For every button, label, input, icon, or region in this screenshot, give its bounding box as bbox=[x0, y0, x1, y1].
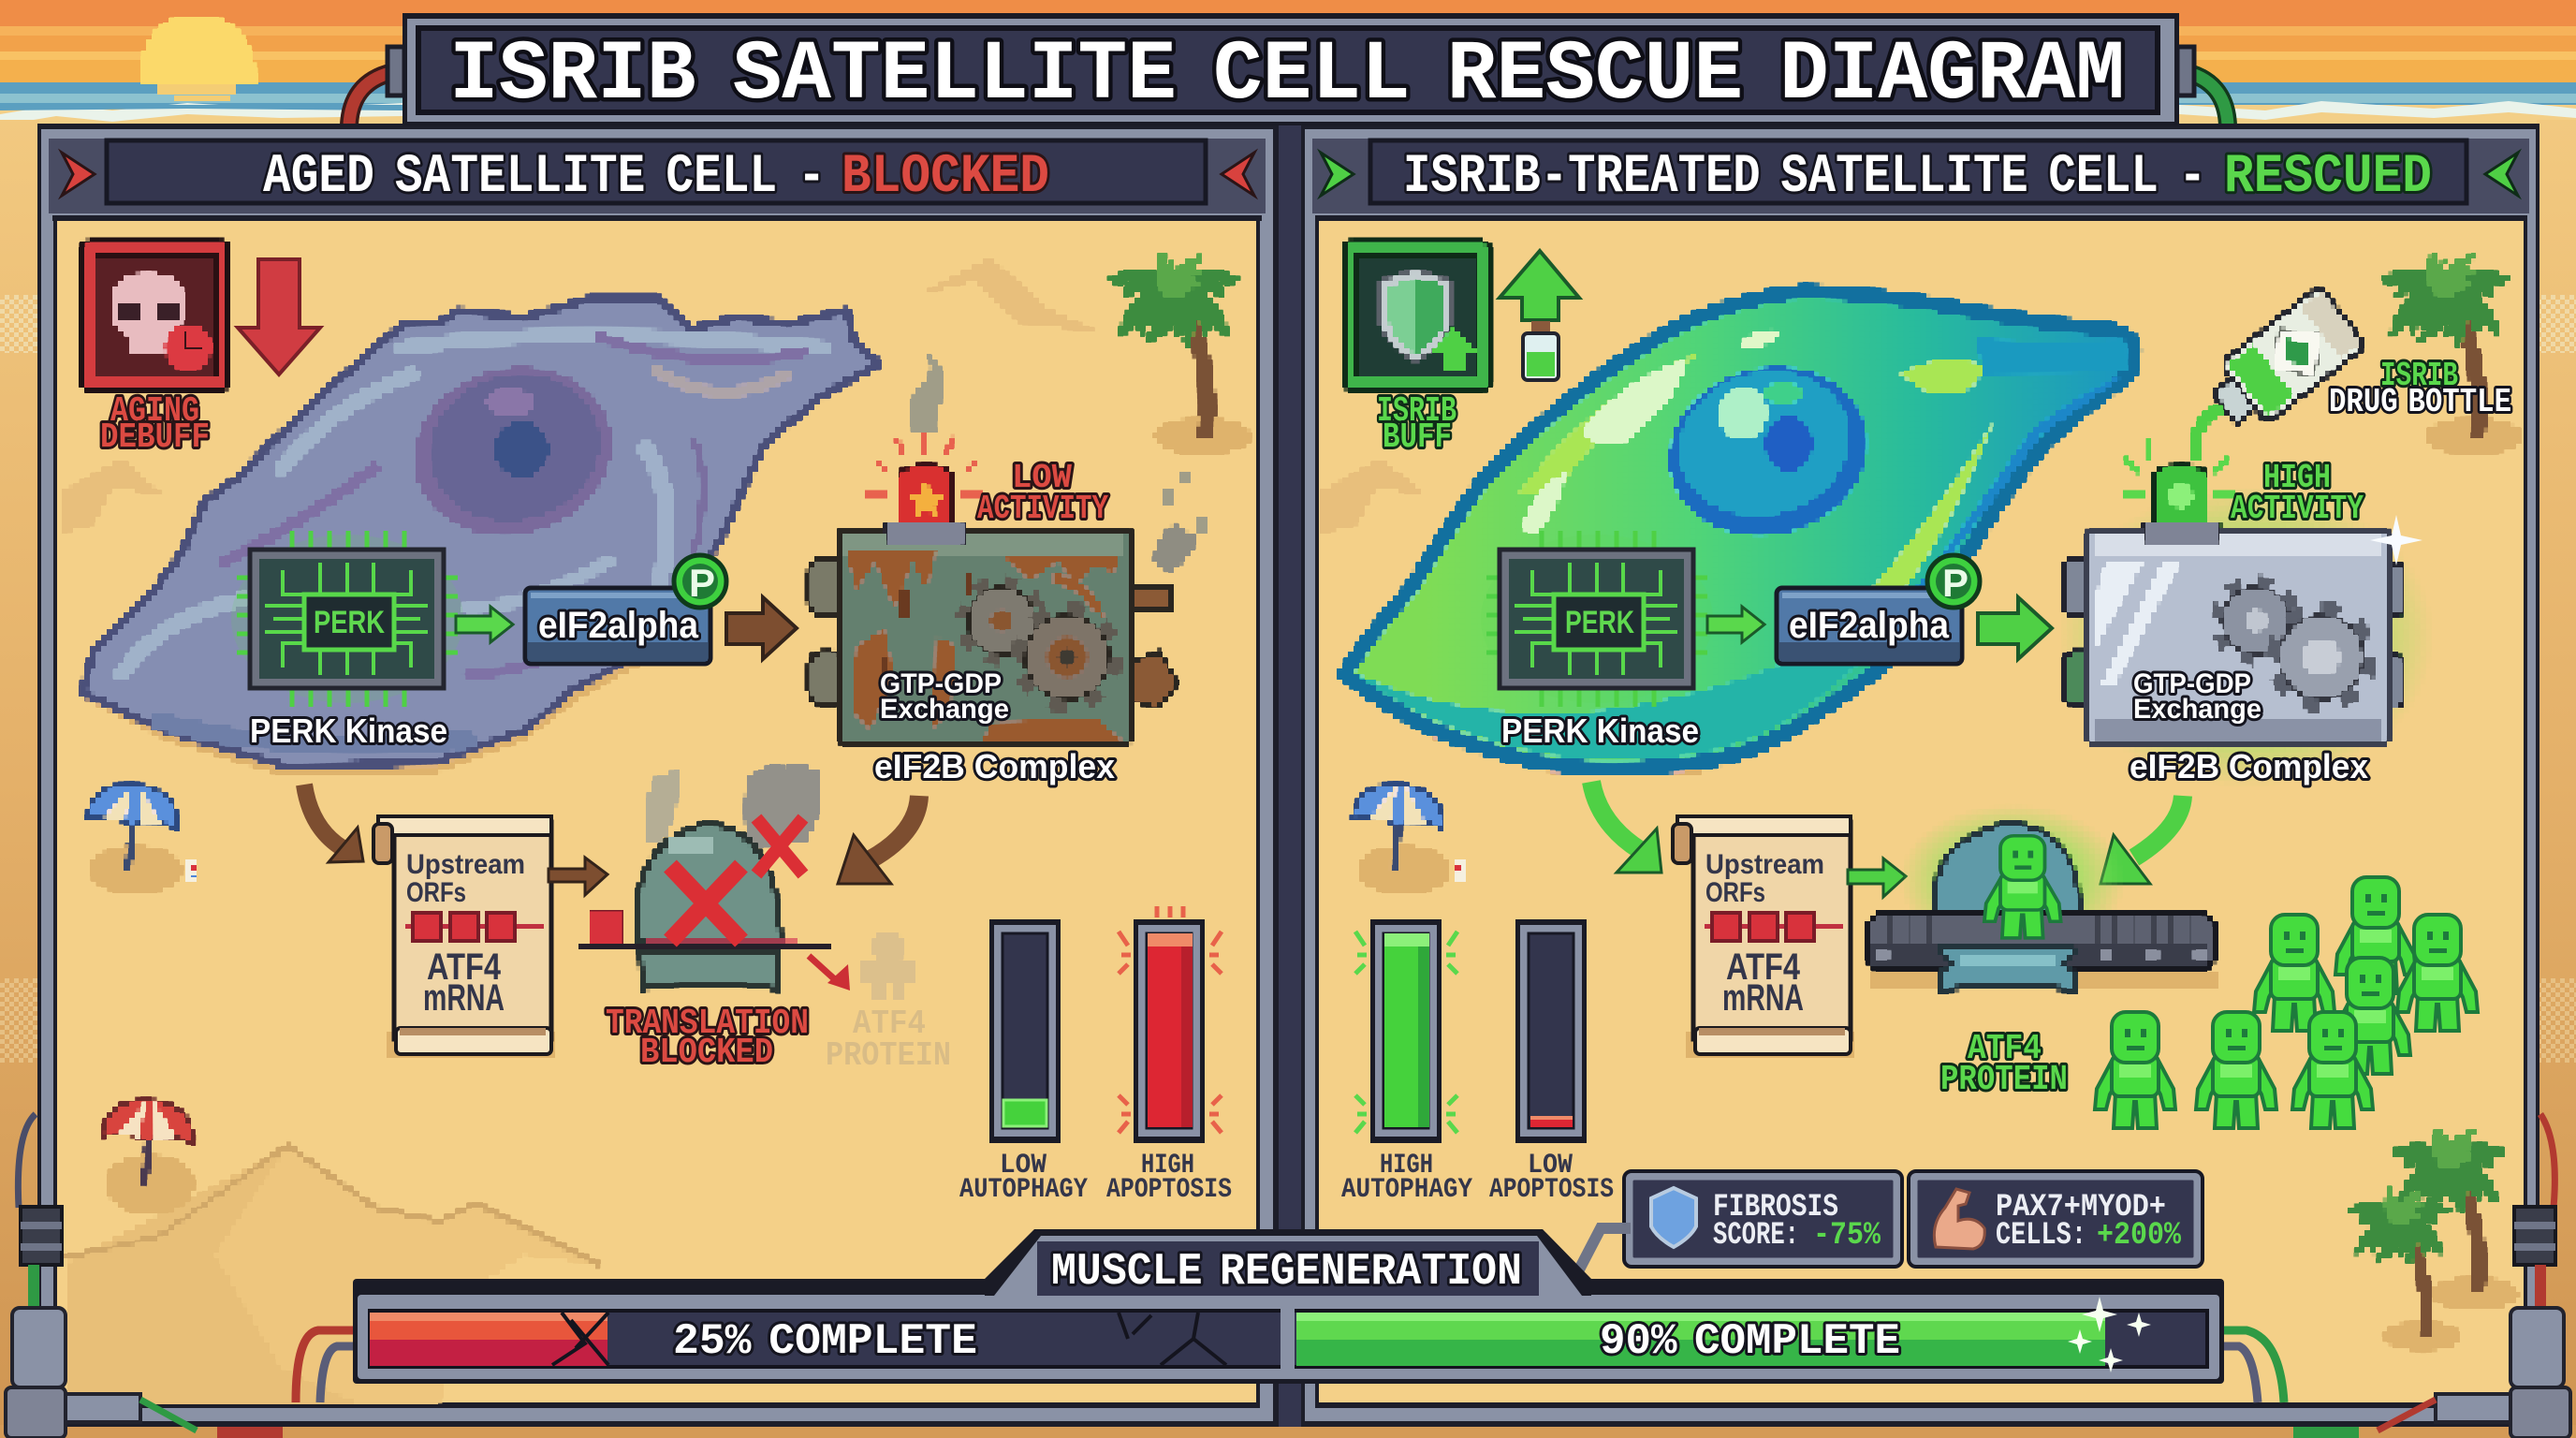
label: PERK Kinase: PERK Kinase bbox=[250, 712, 447, 750]
ISRIB buff label: ISRIB bbox=[1377, 391, 1456, 432]
bar: low apoptosis bbox=[1489, 919, 1614, 1206]
label: high apoptosis: APOPTOSIS bbox=[1106, 1174, 1232, 1206]
scroll text: ATF4 mRNA bbox=[423, 946, 505, 1019]
scroll text: ATF4 mRNA bbox=[1722, 946, 1804, 1019]
scroll text: upstream ORFs: ORFs bbox=[406, 877, 466, 908]
rescued progress fill 90% bbox=[1296, 1297, 2151, 1372]
palm tree top right bbox=[2373, 245, 2523, 455]
ATF4 mRNA scroll bbox=[1673, 816, 1854, 1058]
connector: progress bar to stats bbox=[1576, 1228, 1631, 1275]
small red X bbox=[756, 818, 803, 874]
ISRIB buff label bbox=[1377, 391, 1456, 458]
gtp-gdp exchange label: GTP-GDP bbox=[880, 668, 1002, 699]
header chevron right bbox=[2485, 153, 2518, 196]
title text: ISRIB SATELLITE CELL RESCUE DIAGRAM bbox=[449, 28, 2125, 124]
arrow: eIF2alpha to eIF2B (weak) bbox=[726, 597, 797, 659]
stat: pax7+myod+ cells bbox=[1909, 1171, 2203, 1267]
scroll text: upstream ORFs: Upstream bbox=[1705, 849, 1824, 880]
scroll text: upstream ORFs bbox=[1705, 849, 1824, 908]
tall palm tree bottom right bbox=[2384, 1122, 2519, 1311]
failed output arrow bbox=[809, 956, 850, 990]
pipes: title connectors bbox=[349, 47, 2228, 125]
label: low autophagy: LOW bbox=[1000, 1150, 1046, 1181]
arrow: PERK to scroll (weak) bbox=[304, 785, 363, 862]
header chevron right bbox=[1222, 153, 1254, 196]
icon: flexed arm bbox=[1934, 1189, 1984, 1249]
ATF4 protein label bbox=[1940, 1029, 2068, 1100]
arrow: scroll to ribosome (strong) bbox=[1848, 858, 1906, 897]
large red X bbox=[670, 866, 741, 941]
translation blocked label: TRANSLATION bbox=[606, 1004, 809, 1044]
bar: high apoptosis bbox=[1106, 906, 1232, 1206]
high activity label: ACTIVITY bbox=[2231, 490, 2364, 528]
ghost ATF4 protein bbox=[862, 933, 915, 998]
gtp-gdp exchange label: GTP-GDP bbox=[2133, 668, 2251, 699]
label: low apoptosis: LOW bbox=[1528, 1150, 1573, 1181]
arrow: PERK to eIF2alpha bbox=[1707, 607, 1764, 642]
gtp-gdp exchange label bbox=[880, 668, 1009, 725]
faded ATF4 protein label: ATF4 bbox=[853, 1005, 926, 1043]
rescued header text: ISRIB-TREATED SATELLITE CELL - bbox=[1403, 147, 2206, 208]
palm tree bbox=[1102, 245, 1251, 455]
side cables and joints right bbox=[2293, 1114, 2570, 1438]
header chevron left bbox=[1321, 153, 1354, 196]
label: low apoptosis: APOPTOSIS bbox=[1489, 1174, 1614, 1206]
ATF4 protein label: ATF4 bbox=[1968, 1029, 2042, 1069]
translation blocked label bbox=[606, 1004, 809, 1073]
pax7 text: CELLS: bbox=[1996, 1218, 2086, 1254]
label: eIF2B Complex: eIF2B Complex bbox=[2130, 747, 2368, 785]
label: high apoptosis bbox=[1106, 1150, 1232, 1206]
active ribosome on conveyor bbox=[1866, 805, 2219, 990]
scroll text: ATF4 mRNA: mRNA bbox=[1722, 977, 1804, 1019]
sand dunes bbox=[62, 257, 1100, 1402]
high activity label bbox=[2231, 459, 2364, 528]
rescued panel frame bbox=[1279, 124, 2539, 1427]
fibrosis text bbox=[1713, 1190, 1881, 1254]
arrow: eIF2B to ribosome (strong) bbox=[2100, 796, 2183, 884]
sparkles bbox=[2068, 1297, 2151, 1372]
tab: muscle regeneration: MUSCLE REGENERATION bbox=[1051, 1247, 1522, 1298]
panel: ISRIB-treated satellite cell (rescued) bbox=[1279, 124, 2539, 1427]
PERK chip text: PERK bbox=[314, 605, 385, 640]
pax7 text: +200% bbox=[2097, 1218, 2182, 1254]
panel: aged satellite cell (blocked) bbox=[37, 124, 1279, 1427]
muscle regeneration meter bbox=[353, 1229, 2224, 1384]
wires: progress bar left bbox=[296, 1330, 354, 1402]
fibrosis text: -75% bbox=[1813, 1218, 1881, 1254]
phosphate badge: P bbox=[1942, 561, 1969, 605]
stat: fibrosis score bbox=[1624, 1171, 1902, 1267]
side cables and joints left bbox=[6, 1114, 283, 1438]
low activity label: LOW bbox=[1012, 459, 1072, 497]
low activity label bbox=[977, 459, 1108, 528]
gtp-gdp exchange label bbox=[2133, 668, 2261, 725]
label: eIF2B Complex: eIF2B Complex bbox=[874, 747, 1115, 785]
aged header bar bbox=[62, 140, 1254, 208]
label: high apoptosis: HIGH bbox=[1141, 1150, 1194, 1181]
eIF2alpha node bbox=[1777, 555, 1980, 664]
arrow: PERK to scroll (strong) bbox=[1591, 782, 1661, 873]
sand dune bbox=[1321, 459, 1427, 534]
vial icon bbox=[1523, 321, 1559, 380]
ISRIB drug bottle bbox=[2194, 286, 2511, 461]
scroll text: upstream ORFs: Upstream bbox=[406, 849, 525, 880]
faded ATF4 protein label bbox=[826, 1005, 951, 1075]
gtp-gdp exchange label: Exchange bbox=[880, 694, 1009, 725]
short palm tree bottom right bbox=[2342, 1183, 2462, 1351]
PERK kinase chip bbox=[231, 531, 463, 707]
header chevron left bbox=[62, 153, 95, 196]
up arrow bbox=[1500, 251, 1579, 320]
label: high autophagy: AUTOPHAGY bbox=[1341, 1174, 1472, 1206]
drug bottle label: DRUG BOTTLE bbox=[2329, 383, 2511, 421]
scroll text: upstream ORFs: ORFs bbox=[1705, 877, 1765, 908]
sparkle bbox=[2370, 515, 2422, 565]
tab: muscle regeneration bbox=[985, 1229, 1591, 1298]
fibrosis text: SCORE: bbox=[1713, 1218, 1799, 1254]
aged progress text: 25% COMPLETE bbox=[673, 1317, 977, 1366]
high activity label: HIGH bbox=[2263, 459, 2331, 497]
pax7 text bbox=[1996, 1190, 2182, 1254]
gtp-gdp exchange label: Exchange bbox=[2133, 694, 2261, 725]
status word blocked: BLOCKED bbox=[842, 147, 1049, 208]
aging debuff label: DEBUFF bbox=[100, 418, 210, 458]
blue beach umbrella bbox=[82, 780, 198, 894]
healthy cell blob bbox=[1345, 291, 2134, 777]
title banner bbox=[402, 13, 2179, 125]
aging debuff badge bbox=[82, 242, 320, 458]
rescued progress text: 90% COMPLETE bbox=[1600, 1317, 1900, 1366]
low activity label: ACTIVITY bbox=[977, 490, 1108, 528]
phosphate badge bbox=[674, 555, 726, 608]
blue beach umbrella bbox=[1348, 780, 1466, 894]
aging debuff arrow bbox=[238, 259, 320, 374]
ISRIB buff badge bbox=[1344, 242, 1579, 458]
phosphate badge bbox=[1927, 555, 1980, 608]
arrow: eIF2alpha to eIF2B (strong) bbox=[1978, 597, 2052, 659]
aged header text: AGED SATELLITE CELL - bbox=[263, 147, 826, 208]
ATF4 protein emerging bbox=[1984, 836, 2061, 938]
label: low apoptosis bbox=[1489, 1150, 1614, 1206]
meter frame bbox=[353, 1279, 2224, 1384]
phosphate badge: P bbox=[689, 561, 715, 605]
aged progress fill 25% bbox=[370, 1313, 1226, 1366]
label: high autophagy: HIGH bbox=[1380, 1150, 1433, 1181]
eIF2alpha text: eIF2alpha bbox=[538, 605, 699, 646]
label: low autophagy bbox=[959, 1150, 1088, 1206]
eIF2alpha text: eIF2alpha bbox=[1789, 605, 1950, 646]
wires: progress bar right bbox=[2224, 1330, 2284, 1402]
PERK kinase chip bbox=[1481, 531, 1713, 707]
PERK chip text: PERK bbox=[1565, 605, 1634, 640]
drug bottle label bbox=[2329, 357, 2511, 421]
label: high autophagy bbox=[1341, 1150, 1472, 1206]
arrow: PERK to eIF2alpha bbox=[456, 607, 513, 642]
arrow: scroll to ribosome (weak) bbox=[549, 858, 607, 895]
rescued header bar bbox=[1321, 140, 2518, 208]
label: PERK Kinase: PERK Kinase bbox=[1501, 712, 1699, 750]
fibrosis text: FIBROSIS bbox=[1713, 1190, 1838, 1225]
drug bottle label: ISRIB bbox=[2380, 357, 2458, 395]
status word rescued: RESCUED bbox=[2224, 147, 2432, 208]
aged cell blob bbox=[82, 299, 879, 777]
smoke over stalled ribosome bbox=[644, 764, 822, 847]
stalled ribosome bbox=[578, 818, 850, 990]
faded ATF4 protein label: PROTEIN bbox=[826, 1036, 951, 1075]
scroll text: ATF4 mRNA: ATF4 bbox=[1726, 946, 1801, 988]
smoke over machine bbox=[910, 354, 1209, 573]
scroll text: upstream ORFs bbox=[406, 849, 525, 908]
scroll text: ATF4 mRNA: ATF4 bbox=[427, 946, 502, 988]
eIF2B complex: rusted machine bbox=[809, 434, 1178, 743]
label: low autophagy: AUTOPHAGY bbox=[959, 1174, 1088, 1206]
aging debuff label bbox=[100, 391, 210, 458]
arrow: eIF2B to ribosome (weak) bbox=[838, 796, 919, 884]
ISRIB buff label: BUFF bbox=[1383, 418, 1452, 458]
bar: high autophagy bbox=[1341, 919, 1472, 1206]
translation blocked label: BLOCKED bbox=[640, 1033, 773, 1073]
pax7 text: PAX7+MYOD+ bbox=[1996, 1190, 2166, 1225]
ATF4 mRNA scroll bbox=[373, 816, 555, 1058]
ATF4 protein label: PROTEIN bbox=[1940, 1060, 2068, 1100]
eIF2alpha node bbox=[525, 555, 726, 664]
icon: setting sun bbox=[139, 15, 257, 103]
group of ATF4 proteins bbox=[2095, 877, 2478, 1128]
scroll text: ATF4 mRNA: mRNA bbox=[423, 977, 505, 1019]
bar: low autophagy bbox=[959, 919, 1088, 1206]
red beach umbrella bbox=[99, 1097, 195, 1214]
icon: shield bbox=[1651, 1188, 1696, 1247]
eIF2B complex: clean machine bbox=[2059, 437, 2434, 786]
aging debuff label: AGING bbox=[110, 391, 199, 432]
aged panel frame bbox=[37, 124, 1279, 1427]
